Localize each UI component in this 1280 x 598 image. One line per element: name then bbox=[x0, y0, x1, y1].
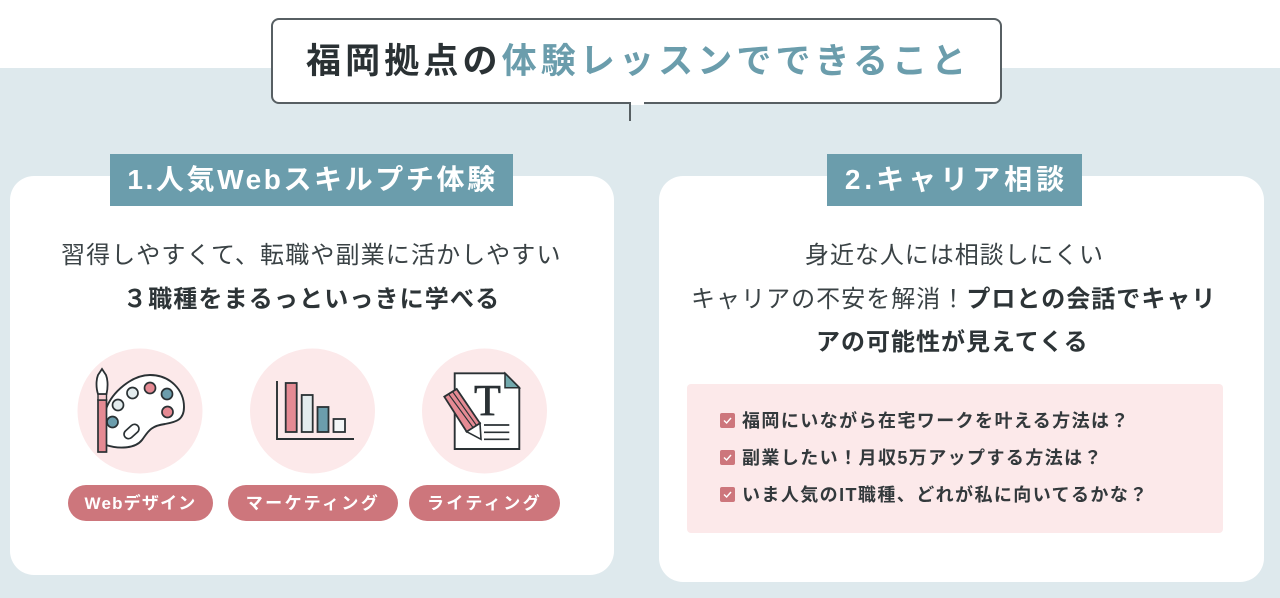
heading: skills: 1.人気Webスキルプチ体験 bbox=[127, 164, 498, 195]
heading: career bbox=[827, 154, 1082, 206]
text block: career intro bbox=[691, 242, 1216, 356]
panel: consultation examples bbox=[687, 384, 1223, 533]
item 1: 福岡にいながら在宅ワークを叶える方法は？ bbox=[742, 411, 1130, 431]
text block: career intro: アの可能性が見えてくる bbox=[816, 329, 1089, 356]
text block: career intro: 身近な人には相談しにくい bbox=[805, 242, 1104, 269]
pill: web design: Webデザイン bbox=[84, 494, 196, 513]
pill: web design bbox=[68, 485, 213, 521]
text block: career intro: キャリアの不安を解消！プロとの会話でキャリ bbox=[691, 286, 1216, 313]
item 2: 副業したい！月収5万アップする方法は？ bbox=[742, 448, 1103, 468]
pill: marketing bbox=[228, 485, 398, 521]
pill: marketing: マーケティング bbox=[246, 494, 380, 513]
icon: bar chart bbox=[250, 348, 375, 474]
text block: skills intro: ３職種をまるっといっきに学べる bbox=[123, 286, 500, 313]
item 3: いま人気のIT職種、どれが私に向いてるかな？ bbox=[742, 485, 1149, 505]
panel: skills bbox=[10, 176, 614, 575]
title text: 福岡拠点の体験レッスンでできること bbox=[306, 42, 970, 81]
heading: skills bbox=[110, 154, 513, 206]
title callout tail bbox=[629, 102, 644, 121]
heading: career: 2.キャリア相談 bbox=[845, 164, 1068, 195]
pill: writing bbox=[409, 485, 560, 521]
text block: skills intro bbox=[61, 242, 562, 313]
panel: career bbox=[659, 176, 1264, 582]
icon: document and pencil: T bbox=[474, 376, 501, 425]
text block: skills intro: 習得しやすくて、転職や副業に活かしやすい bbox=[61, 242, 562, 269]
icon: palette and brush bbox=[78, 348, 202, 474]
pill: writing: ライティング bbox=[427, 494, 542, 513]
title box bbox=[271, 18, 1002, 104]
icon: document and pencil bbox=[422, 348, 547, 474]
